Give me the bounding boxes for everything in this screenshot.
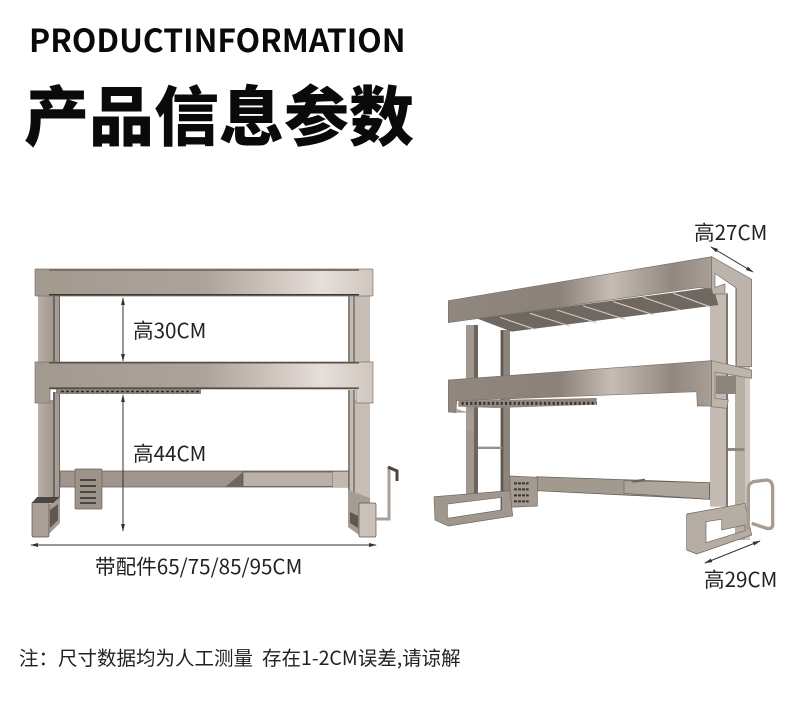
dimension arrow: width (31, 544, 376, 546)
right leg upper (348, 296, 370, 362)
right foot (348, 490, 376, 537)
top shelf mesh (477, 287, 718, 332)
hanging comb (458, 398, 597, 408)
label: 29cm: 高29CM (704, 563, 777, 593)
label: 44cm: 高44CM (133, 437, 206, 467)
hanging comb (56, 389, 201, 394)
dimension arrow: 30cm (122, 298, 124, 361)
dimension arrow: 29cm (705, 541, 760, 563)
utensil box (510, 476, 537, 507)
front view rack (32, 269, 397, 537)
second shelf (448, 361, 752, 413)
left leg lower (38, 392, 60, 510)
side hook (376, 467, 397, 519)
left leg upper (38, 296, 60, 362)
sliding rail extension (624, 479, 709, 499)
top shelf side frame (712, 257, 752, 367)
bottom rail (60, 471, 348, 487)
english title: PRODUCTINFORMATION (29, 16, 406, 62)
bottom rail (537, 477, 710, 499)
dimension arrow: 27cm (711, 247, 753, 272)
label: 27cm: 高27CM (694, 216, 767, 246)
left foot (434, 491, 513, 526)
top shelf (35, 269, 373, 296)
dimension arrow: 44cm (122, 395, 124, 531)
left front bracket (456, 407, 474, 430)
side hook (748, 480, 773, 530)
right foot (687, 503, 752, 554)
sliding rail extension (225, 472, 348, 487)
right leg lower (348, 390, 370, 500)
front left leg (466, 325, 478, 495)
inner right bar (726, 448, 744, 451)
top shelf front (448, 257, 712, 323)
back right leg (735, 287, 750, 540)
perspective view rack (434, 257, 773, 554)
left cross bar (478, 447, 502, 449)
label: 30cm: 高30CM (133, 314, 206, 344)
label: width: 带配件65/75/85/95CM (95, 550, 302, 580)
utensil box (75, 469, 102, 509)
back left leg (501, 330, 510, 510)
left foot (32, 497, 60, 537)
chinese title: 产品信息参数 (24, 65, 414, 159)
footnote: 注：尺寸数据均为人工测量 存在1-2CM误差,请谅解 (19, 642, 461, 671)
right front leg (710, 293, 728, 507)
second shelf (35, 362, 373, 403)
